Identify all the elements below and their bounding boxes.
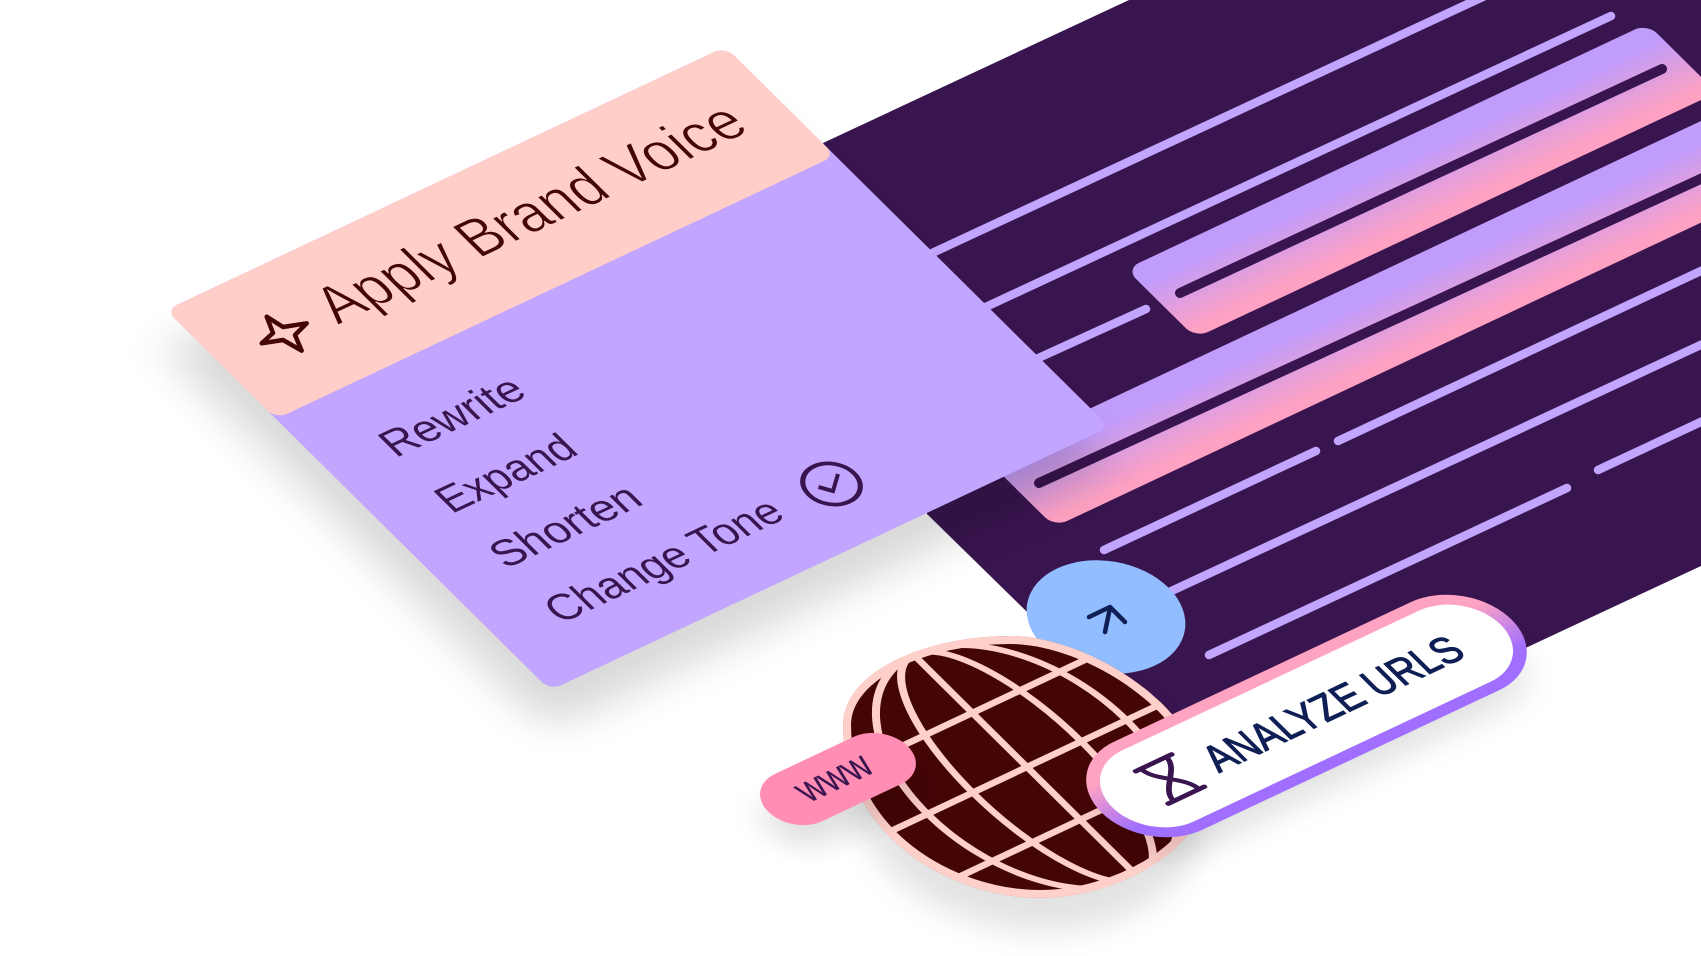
label: WWW: WWW <box>788 750 882 808</box>
menu item: Expand: Expand <box>424 426 588 521</box>
panel: card header <box>166 47 835 419</box>
icon: arrow up <box>1089 607 1125 632</box>
button: Analyze URLs pill <box>1067 582 1546 850</box>
panel: dark document <box>823 0 1701 794</box>
icon: sparkle star <box>262 317 307 351</box>
highlight block: lower gradient bar <box>985 75 1701 527</box>
label: ANALYZE URLS: ANALYZE URLS <box>1191 628 1475 780</box>
text lines: document lines <box>900 0 1701 655</box>
icon: hourglass <box>1136 754 1204 804</box>
panel: brand voice menu card <box>166 47 1109 690</box>
menu item: Change Tone: Change Tone <box>533 490 794 631</box>
menu item: Rewrite: Rewrite <box>368 368 536 465</box>
menu item: Shorten: Shorten <box>478 476 652 576</box>
button: blue arrow circle <box>995 539 1217 695</box>
icon: check circle <box>791 456 872 512</box>
heading: Apply Brand Voice: Apply Brand Voice <box>299 92 762 335</box>
highlight block: upper gradient bar <box>1126 24 1701 338</box>
icon: globe <box>843 636 1188 898</box>
tag: WWW pill <box>745 723 931 835</box>
